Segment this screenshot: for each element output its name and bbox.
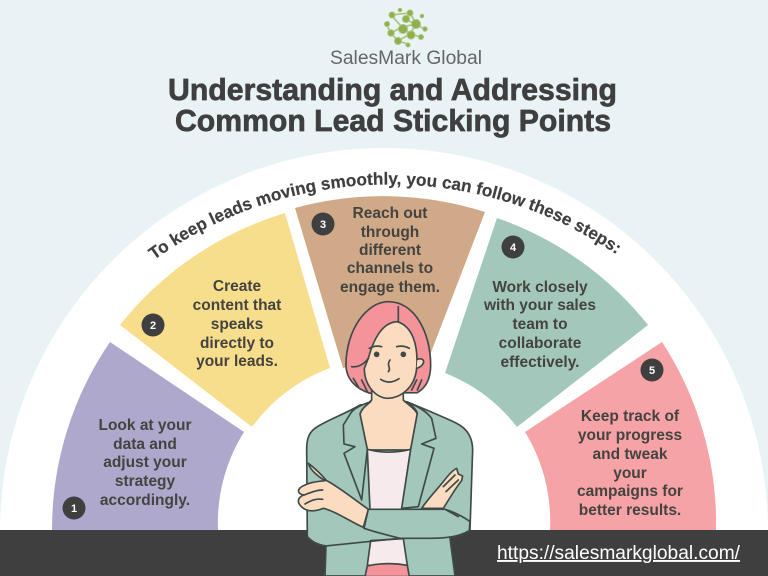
step 1 text: strategy <box>115 473 176 490</box>
panel: step 3 <box>295 196 485 368</box>
icon: green network globe <box>384 8 427 47</box>
step 3 badge <box>312 212 334 236</box>
step 4 text: effectively. <box>501 354 579 371</box>
step 5 badge <box>640 358 664 382</box>
step 4 text: Work closely <box>492 279 588 296</box>
step 3 text: engage them. <box>340 279 440 296</box>
step 1 text: Look at your <box>98 417 192 434</box>
step 2 badge <box>142 314 164 336</box>
step 2 text <box>193 278 281 370</box>
step 3 badge: 3 <box>320 219 326 231</box>
ear <box>417 359 424 368</box>
step 1 text: adjust your <box>103 454 187 471</box>
step 3 text: channels to <box>347 260 433 277</box>
step 1 badge: 1 <box>71 503 77 515</box>
curved subtitle: To keep leads moving smoothly, you can follow these steps: <box>147 172 620 258</box>
step 5 text: your <box>613 465 647 482</box>
panel: step 5 <box>525 342 716 530</box>
sleeve <box>364 509 470 538</box>
title <box>168 72 617 138</box>
pants <box>365 564 409 576</box>
face <box>364 322 417 398</box>
step 4 text: team to <box>512 316 568 333</box>
step 4 text <box>483 279 596 371</box>
step 5 text: campaigns for <box>577 483 683 500</box>
step 3 text <box>340 205 440 296</box>
step 1 text: data and <box>113 436 177 453</box>
logo wordmark: SalesMark Global <box>330 48 482 69</box>
step 5 text: Keep track of <box>581 408 680 425</box>
jacket body <box>307 402 473 576</box>
neck and chest <box>360 390 417 450</box>
illustration: woman with crossed arms <box>298 302 473 576</box>
panel: step 1 <box>52 342 244 530</box>
step 1 text: accordingly. <box>100 492 190 509</box>
step 2 text: directly to <box>200 335 274 352</box>
step 2 text: your leads. <box>196 353 278 370</box>
panel: step 2 <box>120 213 330 427</box>
left hand and forearm <box>298 463 368 527</box>
step 3 text: Reach out <box>353 205 427 222</box>
logo <box>330 8 482 69</box>
lapels <box>343 402 371 500</box>
step 2 text: Create <box>213 278 262 295</box>
step 5 text: and tweak <box>593 446 668 463</box>
title: Common Lead Sticking Points <box>175 103 611 138</box>
hair <box>346 302 431 393</box>
shirt <box>367 449 411 510</box>
step 4 text: with your sales <box>483 297 596 314</box>
step 4 text: collaborate <box>499 335 582 352</box>
step 5 text: your progress <box>578 427 682 444</box>
white semicircle backdrop <box>0 148 768 532</box>
step 5 badge: 5 <box>649 365 655 377</box>
panel: step 4 <box>445 218 648 427</box>
title: Understanding and Addressing <box>168 72 617 107</box>
step 4 badge: 4 <box>510 242 517 254</box>
step 5 text: better results. <box>579 502 681 519</box>
footer url: https://salesmarkglobal.com/ <box>497 543 741 564</box>
step 2 badge: 2 <box>150 320 156 332</box>
step 2 text: speaks <box>211 316 263 333</box>
right hand <box>422 468 463 508</box>
step 3 text: different <box>359 242 421 259</box>
eyes and mouth <box>369 346 409 382</box>
fringe <box>352 307 398 367</box>
step 5 text <box>577 408 683 519</box>
footer bar <box>0 530 768 576</box>
step 1 text <box>98 417 192 509</box>
step 1 badge <box>62 496 86 520</box>
step 2 text: content that <box>193 297 281 314</box>
step 3 text: through <box>361 224 419 241</box>
step 4 badge <box>502 236 524 258</box>
